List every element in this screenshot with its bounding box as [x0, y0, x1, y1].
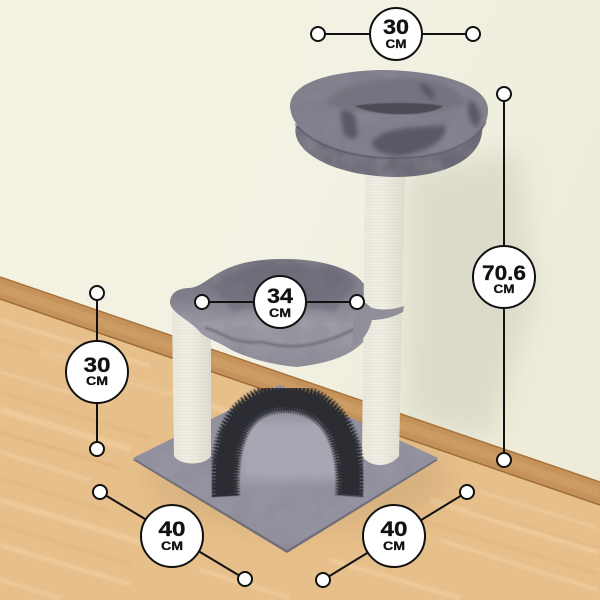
dimension: hammock 34 cm: 34: [267, 285, 293, 308]
dimension: hammock 34 cm: CM: [269, 306, 291, 320]
floor shadow: [150, 430, 450, 530]
sisal post: rear lower: [172, 310, 211, 464]
dimension: height 70.6 cm: CM: [494, 282, 514, 296]
skirting board: [0, 277, 600, 505]
dimension: base width 40 cm left: [93, 485, 252, 586]
dimension: base depth 40 cm right: CM: [383, 539, 405, 553]
bed: lower tier: [295, 124, 482, 177]
hammock: bowl: [170, 259, 385, 367]
bed: inner wall: [325, 78, 466, 113]
sisal post: main: [362, 175, 405, 465]
dimension: height 70.6 cm: 70.6: [482, 262, 526, 285]
dimension: height 70.6 cm: [473, 87, 535, 467]
dimension: top 30 cm: 30: [383, 16, 409, 39]
bed: upper cushion: [290, 70, 488, 158]
floor: [0, 299, 600, 600]
brush arch: [225, 398, 351, 496]
dimension: top 30 cm: CM: [386, 37, 406, 51]
dimension: base depth 40 cm right: [316, 485, 474, 587]
dimension: base depth 40 cm right: 40: [380, 518, 408, 541]
bed: dark fur patches: [340, 82, 480, 156]
dimension: post height 30 cm: [66, 286, 128, 456]
dimension: top 30 cm: [311, 8, 480, 60]
dimension: base width 40 cm left: CM: [161, 539, 183, 553]
base plate: [133, 385, 438, 553]
hammock: strap around post: [352, 295, 404, 348]
top bed: [290, 70, 488, 177]
dimension: post height 30 cm: 30: [84, 354, 110, 377]
dimension: post height 30 cm: CM: [86, 374, 108, 388]
dimension: base width 40 cm left: 40: [158, 518, 186, 541]
wall shadow: [405, 150, 535, 440]
dimension: hammock 34 cm: [195, 276, 364, 328]
bed: floor of basket: [355, 103, 443, 114]
